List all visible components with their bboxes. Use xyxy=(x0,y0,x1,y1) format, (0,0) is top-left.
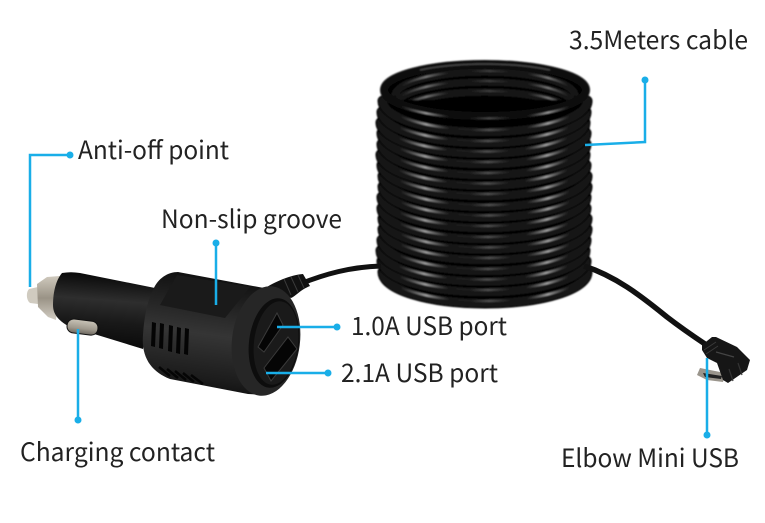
label: Anti-off point: Anti-off point xyxy=(78,131,230,167)
label: 2.1A USB port: 2.1A USB port xyxy=(341,354,499,390)
label: 1.0A USB port: 1.0A USB port xyxy=(351,307,508,343)
USB port upper xyxy=(258,313,283,352)
cable to elbow connector xyxy=(584,266,705,344)
coil interior xyxy=(387,66,583,102)
bottom vents xyxy=(159,367,203,384)
cable coil xyxy=(379,63,590,308)
front face xyxy=(244,295,304,391)
side vents xyxy=(151,322,189,355)
elbow mini USB connector xyxy=(697,337,750,383)
strain relief xyxy=(267,274,310,298)
USB port lower xyxy=(264,337,297,381)
metal plug xyxy=(697,368,725,382)
label: Elbow Mini USB: Elbow Mini USB xyxy=(561,439,739,475)
label: Non-slip groove: Non-slip groove xyxy=(161,200,342,236)
metal collar xyxy=(37,276,60,320)
plug barrel xyxy=(53,272,155,349)
connector body xyxy=(702,337,750,383)
leader: non-slip groove xyxy=(212,240,220,305)
coil loops xyxy=(379,99,590,308)
label: Charging contact: Charging contact xyxy=(20,433,216,469)
cable to charger xyxy=(300,266,381,284)
leader: 1.0A USB port xyxy=(277,324,340,330)
leader: elbow mini USB xyxy=(704,358,710,438)
leader: 3.5 meters cable xyxy=(585,76,648,145)
label: 3.5Meters cable: 3.5Meters cable xyxy=(569,21,748,57)
leader: 2.1A USB port xyxy=(266,370,332,376)
leader: charging contact xyxy=(74,329,82,424)
charger head xyxy=(143,272,280,395)
front face outer ring xyxy=(226,282,306,400)
charging contact xyxy=(66,318,99,336)
leader: anti-off point xyxy=(30,152,74,287)
top ring xyxy=(384,64,586,118)
car charger xyxy=(27,272,310,400)
metal tip xyxy=(27,287,38,304)
grip panel xyxy=(160,275,250,318)
